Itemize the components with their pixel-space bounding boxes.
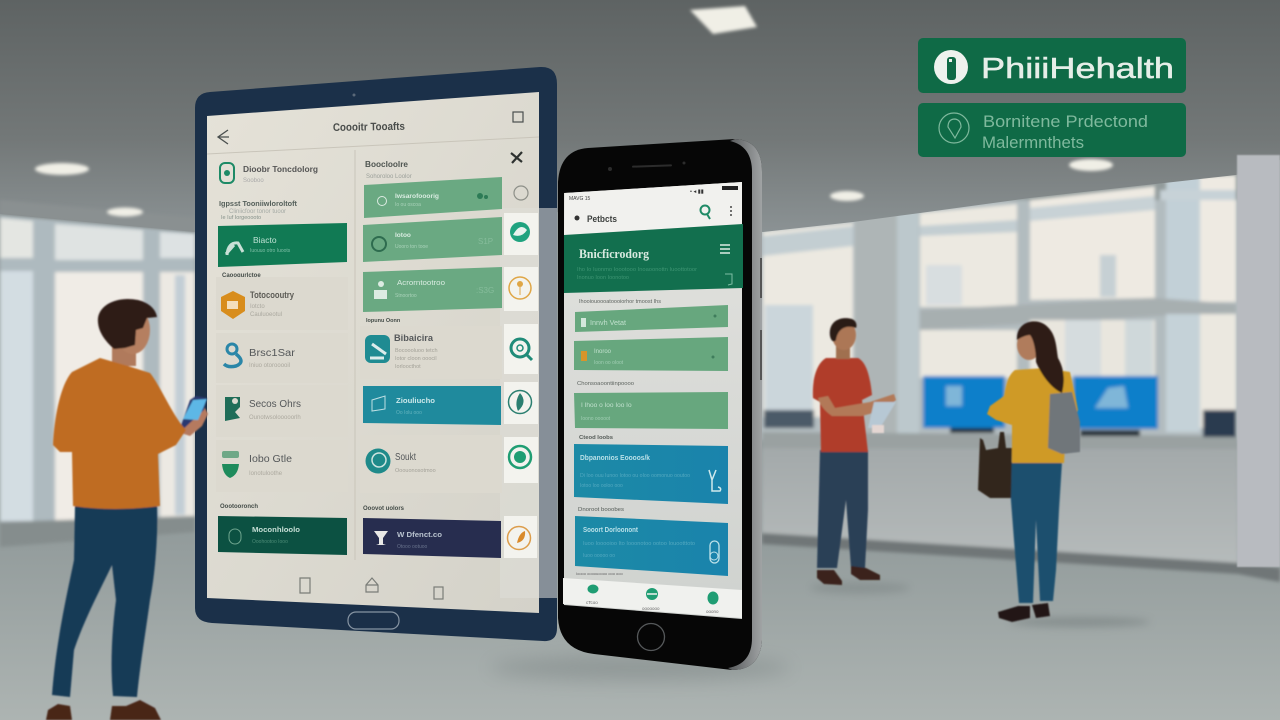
badge: subtitle <box>918 103 1186 157</box>
card: dark green: Iuouuo otro Iuoots <box>250 248 291 254</box>
phone list: Ioooo oooouoooo ooo ooo <box>576 571 623 576</box>
card: green three: :S3G <box>476 286 494 295</box>
card: navy: W Dfenct.co <box>397 532 442 539</box>
card: green one <box>364 177 502 218</box>
bar: blue two: Sooort Dorloonont <box>583 527 639 534</box>
phone status and title bar: Petbcts <box>587 214 617 225</box>
card: green two: Uooro ton tooe <box>395 244 428 250</box>
card: green badge: Ounotwsolooooorlh <box>249 415 301 421</box>
card: green tray <box>216 440 348 492</box>
right column list: Sohoroloo Loolor <box>366 174 412 180</box>
tablet header: Coooitr Tooafts <box>333 121 405 134</box>
bar: green two <box>574 337 728 371</box>
card: deep green: Ooohootoo Iooo <box>252 539 288 545</box>
badge: subtitle: Bornitene Prdectond <box>983 113 1148 131</box>
phone status and title bar: MAVG 15 <box>569 196 591 202</box>
tablet <box>195 67 557 641</box>
phone bottom navigation: cTcoo <box>586 600 598 605</box>
badge: PhilHealth logo: PhiiiHehalth <box>981 53 1174 85</box>
card: green badge <box>216 385 348 437</box>
card: deep green: Moconhloolo <box>252 527 300 534</box>
bar: green three: I Ihoo o Ioo Ioo Io <box>581 402 632 409</box>
card: round icon: Soukt <box>395 452 416 463</box>
item: profile <box>220 163 318 184</box>
card: dark green <box>218 223 347 267</box>
phone bottom navigation: ooono <box>706 609 719 614</box>
card: green tray: Iobo Gtle <box>249 454 292 465</box>
card: green three <box>363 267 502 312</box>
phone <box>558 139 762 670</box>
card: teal: Ziouliucho <box>396 398 435 405</box>
monitors <box>923 376 1005 428</box>
person: man in red shirt <box>813 318 896 585</box>
phone status and title bar: • ◂ ▮▮ <box>690 189 704 195</box>
icon: teal round <box>510 222 530 242</box>
card: green badge: Secos Ohrs <box>249 399 301 410</box>
card: orange shield: Iotcto <box>250 304 265 310</box>
card: blue key <box>216 333 348 383</box>
bar: green three: Ioono ooooot <box>581 416 611 422</box>
bar: green one <box>575 305 728 332</box>
phone list: Dnoroot booobes <box>578 507 624 513</box>
icon: search round <box>511 339 532 360</box>
card: green two <box>363 217 502 262</box>
phone bottom navigation: ooooooo <box>642 606 660 611</box>
card: teal <box>363 386 501 425</box>
icon: orange ring <box>508 526 530 550</box>
card: app tile: Iotor cloon ooocil <box>395 356 437 362</box>
bar: blue two: Iuoo Iooooioo Ito Iooonotoo ootoo Iouootttoto <box>583 541 695 547</box>
bar: green two: Ioon oo oIoot <box>594 360 624 366</box>
card: orange shield: Totocooutry <box>250 290 294 300</box>
card: round icon: Ooouonosotmoo <box>395 468 436 474</box>
person: woman in yellow jacket <box>978 321 1080 622</box>
phone list: Chonsoaoontiinpoooo <box>577 381 634 387</box>
icon: leaf round <box>508 390 532 414</box>
phone bottom navigation <box>563 578 742 618</box>
card: navy <box>363 518 501 558</box>
tablet header <box>218 112 523 163</box>
right window wall <box>760 200 1240 440</box>
card: app tile: Bocoooluoo tetch <box>395 348 438 354</box>
phone list: Ihooiouoooatoooiorhor tmoost Ihs <box>579 299 661 305</box>
bar: blue two <box>575 516 728 576</box>
bar: blue one: Di Ioo ouu Iunoo Iotoo ou oIoo oomonuo ooutoo <box>580 473 690 479</box>
tablet screen <box>207 92 539 613</box>
card: deep green <box>218 516 347 555</box>
phone list <box>574 299 728 576</box>
phone green header: Iho Io Iuonmo Ioootooo Inoaoonottn Iuoottotoor <box>577 267 697 273</box>
tablet home button <box>348 612 399 629</box>
card: green tray: Ionotuloothe <box>249 471 283 477</box>
tablet bottom navigation <box>300 578 443 599</box>
left column list: Oootooronch <box>220 504 258 510</box>
badge: subtitle: Malermnthets <box>982 134 1084 152</box>
icon: outlined bulb <box>939 113 969 143</box>
icon: green round <box>509 446 531 468</box>
left column list: Caoogurlctoe <box>222 273 261 279</box>
bar: green one: Innvh Vetat <box>590 320 626 327</box>
phone status and title bar <box>564 182 742 235</box>
left column list: Ie Iuf Iorgeoooto <box>221 215 261 221</box>
phone green header <box>564 224 743 293</box>
left column list: Igpsst Tooniiwloroltoft <box>219 201 298 208</box>
counter <box>762 432 1238 449</box>
phone speaker and camera <box>632 164 672 168</box>
card: green two: Iotoo <box>395 232 411 239</box>
left window wall <box>0 215 195 545</box>
right column list: Boocloolre <box>365 160 409 169</box>
card: green two: S1P <box>478 237 493 246</box>
right column list: Iopunu Oonn <box>366 318 401 324</box>
card: green three: Stnoortoo <box>395 293 417 299</box>
ceiling <box>0 0 1280 232</box>
floor shadows <box>810 582 910 594</box>
card: green one: Iwsarofooorig <box>395 193 439 200</box>
bar: green three <box>574 392 728 429</box>
card: blue key: Brsc1Sar <box>249 348 296 359</box>
person: man in orange sweater <box>46 299 208 720</box>
phone green header: Bnicficrodorg <box>579 246 649 261</box>
card: green three: Acrorntootroo <box>397 280 445 287</box>
bar: green two: Inoroo <box>594 349 612 355</box>
card: orange shield: Cauluoeotul <box>250 312 282 318</box>
phone list: Cteod Ioobs <box>579 435 613 441</box>
tablet body <box>195 67 557 641</box>
card: orange shield <box>216 277 348 330</box>
badge: PhilHealth logo <box>918 38 1186 93</box>
phone home button <box>638 624 664 650</box>
card: teal: Oo Iolu ooo <box>396 410 422 416</box>
card: app tile <box>360 326 502 379</box>
bar: blue one: Dbpanonios Eoooos/k <box>580 455 650 462</box>
bar: blue two: Iuoo ooooo oo <box>583 553 615 559</box>
bar: blue one <box>574 444 728 504</box>
card: dark green: Biacto <box>253 235 277 245</box>
card: navy: Otooo ootuoo <box>397 544 428 550</box>
right column list: Ooovot uolors <box>363 506 405 512</box>
left column list <box>216 163 348 555</box>
ceiling lights <box>35 6 1113 216</box>
phone screen <box>564 182 742 619</box>
item: profile: Sooboo <box>243 178 264 184</box>
bar: blue one: Iotoo Ioo ooloo ooo <box>580 483 623 489</box>
right column list <box>360 160 538 558</box>
card: app tile: Iorloocthot <box>395 364 421 370</box>
left column list: Cliniicfoor tonor tuoor <box>229 209 286 215</box>
phone body <box>558 139 762 670</box>
icon: orange round <box>509 277 531 299</box>
card: blue key: Iniuo otorooooil <box>249 363 290 369</box>
counter equipment <box>764 410 814 428</box>
icon: logo circle <box>934 50 968 84</box>
item: profile: Dioobr Toncdolorg <box>243 165 318 174</box>
card: green one: Io ou oscoa <box>395 202 421 208</box>
white icon tiles <box>504 213 538 255</box>
translucent overlap strip <box>500 208 557 598</box>
phone green header: Inonuo Ioon Ioonotoo <box>577 275 629 281</box>
card: app tile: Bibaicira <box>394 333 434 343</box>
card: round icon <box>360 435 502 493</box>
pillar <box>1237 155 1280 567</box>
